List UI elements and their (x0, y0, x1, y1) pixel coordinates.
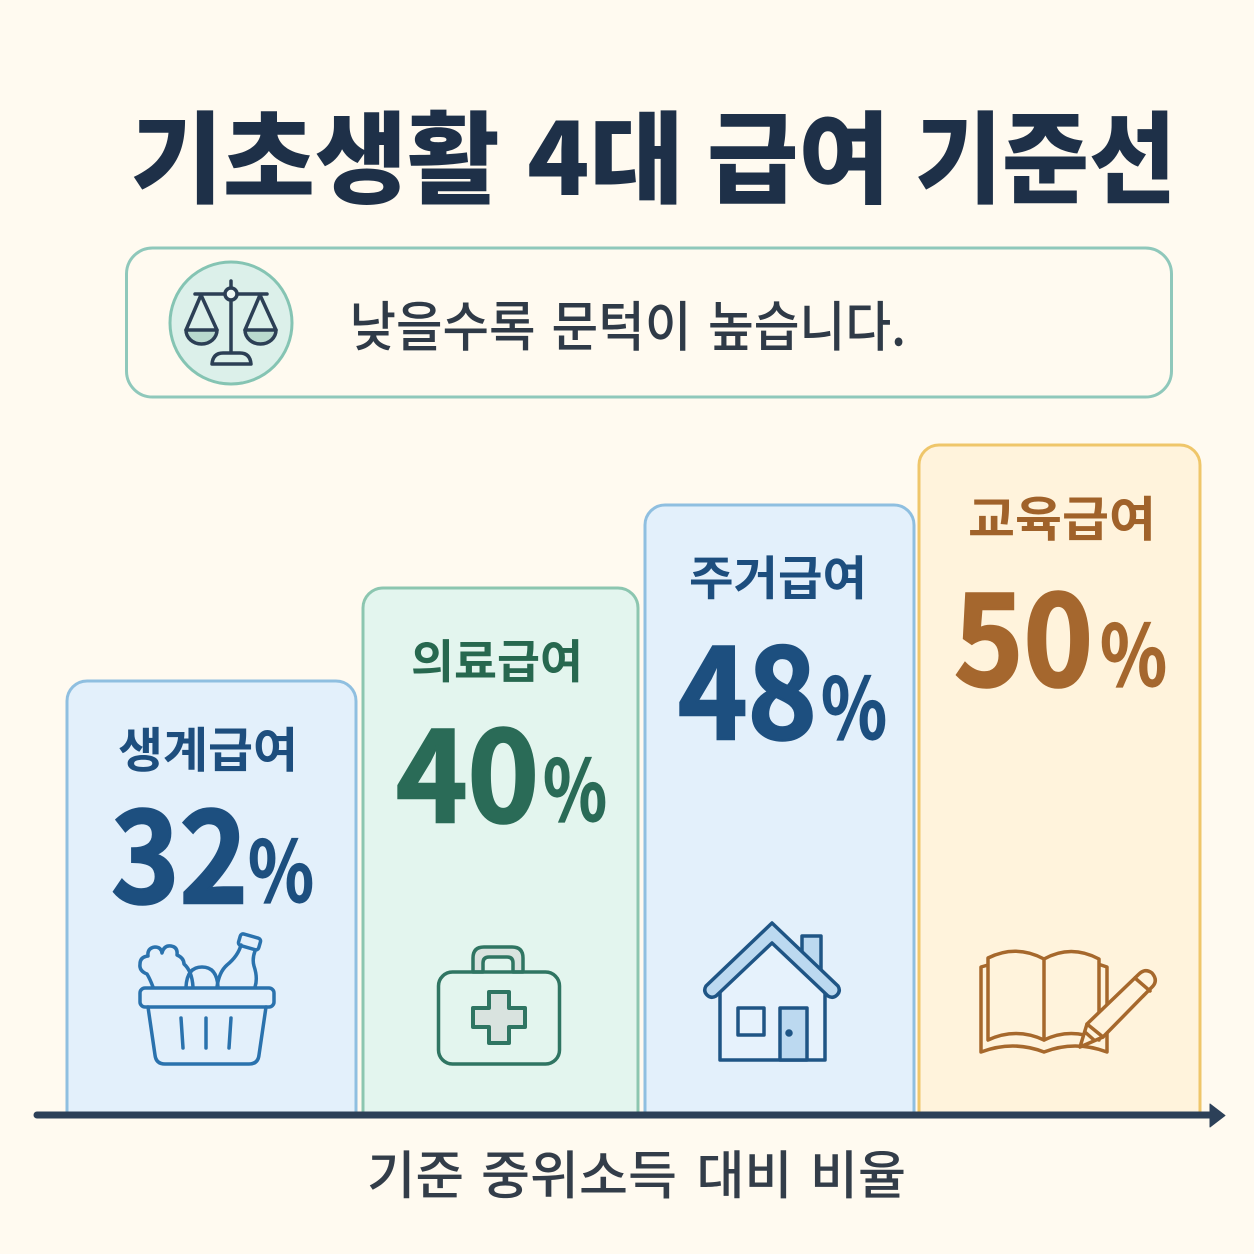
axis arrow (37, 1104, 1225, 1127)
icon: book and pencil (981, 951, 1155, 1052)
icon: grocery basket (140, 933, 274, 1064)
value (954, 541, 1167, 722)
title: 기준선 (915, 79, 1176, 224)
banner text: 낮을수록 (350, 283, 536, 362)
label: 의료급여 (411, 626, 583, 692)
value (396, 677, 607, 858)
axis label: 기준 (367, 1134, 464, 1209)
bar: education benefit 50% (919, 445, 1200, 1113)
bar: housing benefit 48% (645, 505, 914, 1113)
value: % (543, 725, 607, 846)
banner text: 문턱이 (552, 283, 692, 362)
label: 생계급여 (118, 711, 298, 781)
title (130, 79, 1176, 224)
icon: house (705, 923, 839, 1060)
axis label: 대비 (696, 1134, 792, 1209)
axis label (367, 1134, 906, 1209)
value: % (1100, 590, 1167, 711)
value: 32 (111, 758, 248, 939)
axis label: 비율 (810, 1134, 906, 1209)
panel: threshold note banner (126, 248, 1172, 397)
icon: medical kit (438, 947, 560, 1064)
icon: balance scale (170, 262, 292, 384)
title: 4대 (527, 79, 684, 224)
value: 48 (678, 594, 817, 775)
value: % (821, 643, 887, 764)
bar: medical benefit 40% (363, 588, 638, 1113)
title: 기초생활 (130, 79, 500, 224)
label: 교육급여 (968, 480, 1156, 550)
bar: livelihood benefit 32% (67, 681, 356, 1113)
value: 40 (396, 677, 539, 858)
banner text: 높습니다. (708, 283, 906, 362)
value: 50 (954, 541, 1093, 722)
title: 급여 (707, 79, 890, 224)
banner text (350, 283, 906, 362)
value: % (248, 806, 314, 927)
label: 주거급여 (689, 540, 867, 609)
axis label: 중위소득 (481, 1134, 677, 1209)
